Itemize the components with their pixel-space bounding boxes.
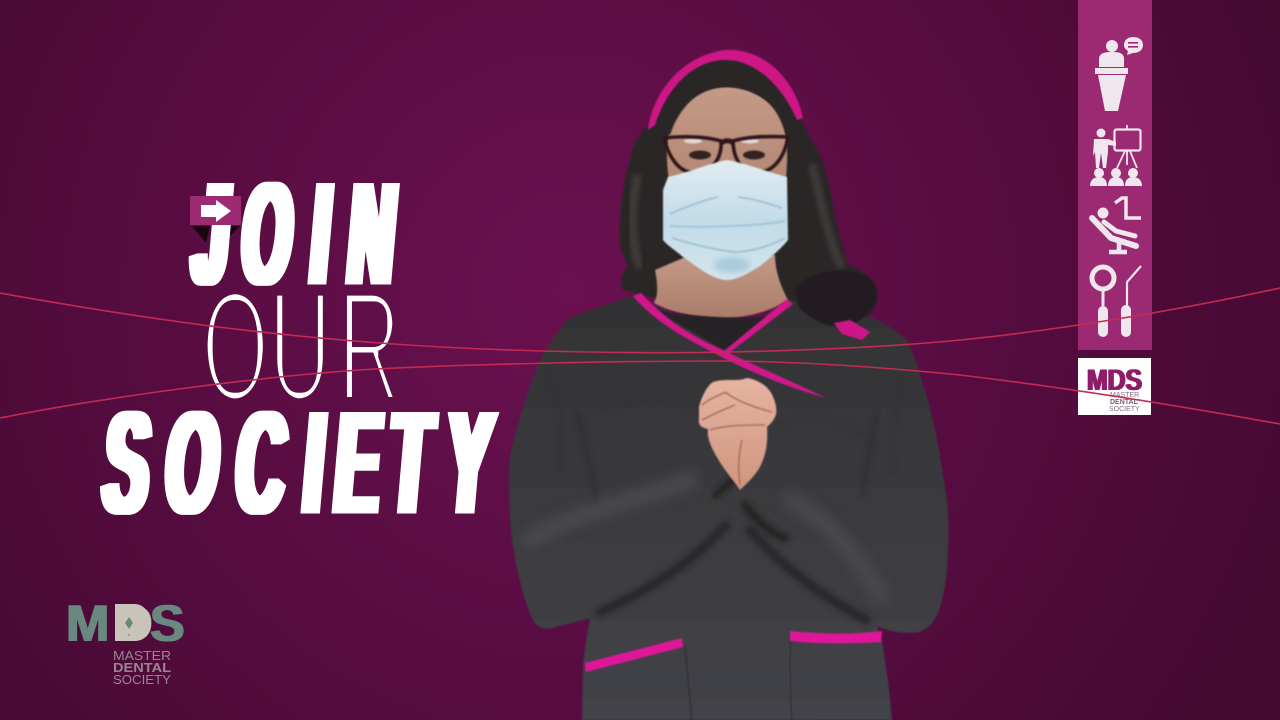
headline [98, 152, 498, 545]
right pocket trim [790, 631, 882, 643]
icon: speaker at lectern [1095, 37, 1143, 111]
icon strip [1078, 0, 1152, 415]
MDS logo card: MDS [1087, 364, 1142, 397]
red crossing lines [0, 288, 1280, 424]
MDS logo bottom left [66, 595, 185, 687]
MDS logo card: DENTAL [1110, 399, 1139, 406]
MDS logo card: MASTER [1110, 392, 1139, 399]
MDS logo card [1078, 358, 1151, 415]
clasped hands [699, 378, 776, 490]
eyes [684, 138, 765, 160]
face [667, 87, 787, 240]
word: JOIN: JOIN [188, 152, 402, 315]
hairline [660, 72, 795, 135]
arrow tag [190, 196, 241, 225]
person in dark scrubs and surgical mask [509, 50, 949, 720]
word: SOCIETY: SOCIETY [98, 382, 498, 545]
undershirt [655, 310, 768, 350]
coat [509, 295, 949, 720]
neckline pink trim [633, 293, 826, 398]
logo tagline: DENTAL [113, 660, 171, 675]
logo tagline: SOCIETY [113, 672, 171, 687]
neck [654, 255, 788, 318]
MDS logo card: SOCIETY [1109, 406, 1140, 413]
headband [648, 50, 803, 130]
mask [663, 160, 788, 280]
word: OUR: OUR [202, 259, 400, 433]
logo tagline [113, 648, 171, 687]
icon: dental mirror and explorer [1092, 266, 1141, 337]
tooth mark in D [115, 604, 149, 641]
glasses [664, 136, 788, 173]
icon: dental chair [1092, 198, 1141, 252]
logo letters: MDS [66, 595, 185, 653]
hair bun [795, 271, 877, 326]
tag shadow [192, 226, 240, 243]
icon: presenter and audience [1090, 125, 1142, 186]
left pocket trim [585, 638, 683, 672]
coat folds and sleeve shading [530, 370, 905, 720]
hair [619, 55, 877, 328]
logo tagline: MASTER [113, 648, 171, 663]
hair tie pink [834, 320, 870, 340]
